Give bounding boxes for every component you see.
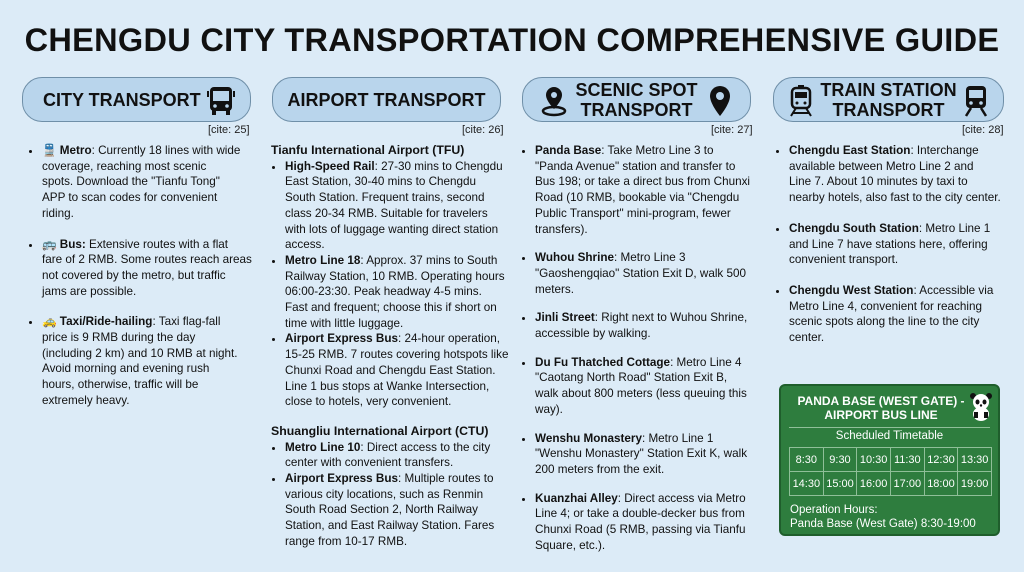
text: city transport: 🚕 Taxi/Ride-hailing: Taxi flag-fall	[42, 315, 220, 328]
text: airport transport: various city locations, such as Renmin	[285, 488, 483, 501]
operation hours: Operation Hours:	[790, 504, 878, 516]
text: scenic spots	[522, 144, 750, 552]
panel header: city transport: CITY TRANSPORT	[43, 90, 201, 110]
text: scenic spots: Panda Base: Take Metro Line 3 to	[535, 144, 713, 157]
text: airport transport: Metro Line 10: Direct access to the city	[285, 441, 490, 454]
timetable grid: 18:00	[927, 478, 955, 490]
text: airport transport: Shuangliu International Airport (CTU)	[271, 424, 488, 438]
icon: train right	[965, 86, 987, 117]
text: scenic spots: "Wenshu Monastery" Station Exit K, walk	[535, 447, 747, 460]
timetable grid: 15:00	[826, 478, 854, 490]
text: scenic spots: "Panda Avenue" station and transfer to	[535, 160, 735, 173]
text: airport transport: range from 10-17 RMB.	[285, 535, 407, 548]
icon: train left	[790, 85, 812, 116]
text: city transport: riding.	[42, 207, 74, 220]
text: city transport: jams are possible.	[42, 285, 136, 298]
text: airport transport: time with little luggage.	[285, 317, 403, 330]
text: scenic spots: transfers).	[535, 223, 588, 236]
timetable grid	[789, 447, 992, 496]
panel: panda base airport bus timetable	[779, 384, 1000, 536]
text: airport transport: Airport Express Bus: 24-hour operation,	[285, 332, 500, 345]
text: airport transport: Fast and frequent; choose this if short on	[285, 301, 497, 314]
text: airport transport: Metro Line 18: Approx. 37 mins to South	[285, 254, 497, 267]
text: city transport: spots. Download the "Tianfu Tong"	[42, 175, 220, 188]
text: city transport: hours, otherwise, traffic will be	[42, 378, 198, 391]
timetable grid: 10:30	[860, 454, 887, 466]
panel header: scenic spot transport	[522, 77, 751, 122]
text: city transport: APP to scan codes for convenient	[42, 191, 217, 204]
text: airport transport: South Road Section 2, North Railway	[285, 503, 478, 516]
icon: bus	[207, 87, 235, 115]
text: scenic spots: Wenshu Monastery: Metro Line 1	[535, 432, 713, 445]
text: airport transport: South Station. Frequent trains, second	[285, 191, 484, 204]
text: scenic spots: Public Transport" mini-program, fewer	[535, 207, 731, 220]
text: train stations	[776, 144, 1001, 344]
text: scenic spots: Line 4; or take a double-decker bus from	[535, 507, 745, 520]
text: airport transport: Line 1 bus stops at Wanke Intersection,	[285, 380, 489, 393]
cite 27: [cite: 27]	[711, 124, 753, 136]
text: scenic spots: Bus 198; or take a direct bus from Chunxi	[535, 175, 750, 188]
text: train stations: Chengdu East Station: Interchange	[789, 144, 979, 157]
text: airport transport: 06:00-23:30. Peak headway 4-5 mins.	[285, 285, 482, 298]
text: city transport: 🚌 Bus: Extensive routes with a flat	[42, 238, 228, 251]
text: airport transport: class 20-34 RMB. Suitable for travelers	[285, 207, 488, 220]
text: city transport	[29, 144, 252, 407]
timetable title: PANDA BASE (WEST GATE) -	[797, 394, 965, 408]
text: train stations: Chengdu South Station: Metro Line 1	[789, 222, 990, 235]
text: airport transport: Chunxi Road and Chengdu East Station.	[285, 364, 496, 377]
text: scenic spots: Road (10 RMB, bookable via "Chengdu	[535, 191, 739, 204]
text: scenic spots: 200 meters from the exit.	[535, 463, 664, 476]
timetable title: AIRPORT BUS LINE	[824, 408, 938, 422]
text: airport transport: with lots of luggage wanting direct station	[285, 223, 498, 236]
text: scenic spots: accessible by walking.	[535, 327, 651, 340]
timetable grid: 11:30	[894, 454, 921, 466]
text: airport transport: 15-25 RMB. 7 routes covering hotspots like	[285, 348, 508, 361]
panel header: train station transport	[773, 77, 1004, 122]
text: airport transport: East Station, 30-40 mins to Chengdu	[285, 175, 476, 188]
text: scenic spots: "Caotang North Road" Station Exit B,	[535, 371, 727, 384]
operation hours: Panda Base (West Gate) 8:30-19:00	[790, 518, 976, 530]
text: scenic spots: way).	[535, 403, 563, 416]
text: scenic spots: "Gaoshengqiao" Station Exit D, walk 500	[535, 267, 746, 280]
text: airport transport	[271, 143, 508, 548]
text: city transport: fare of 2 RMB. Some routes reach areas	[42, 253, 252, 266]
text: airport transport: access.	[285, 238, 325, 251]
text: city transport: not covered by the metro, but traffic	[42, 269, 226, 282]
text: train stations: center.	[789, 331, 824, 344]
text: train stations: Metro Line 4, convenient for reaching	[789, 300, 982, 313]
text: train stations: and Line 7 have stations here, offering	[789, 238, 988, 251]
text: train stations: Line 7. About 10 minutes by taxi to	[789, 175, 968, 188]
panel header: train station transport: TRANSPORT	[832, 100, 944, 120]
timetable grid: 9:30	[829, 454, 851, 466]
text: airport transport: Railway Station, 10 RMB. Operating hours	[285, 270, 505, 283]
text: train stations: nearby hotels, also fast to the city center.	[789, 191, 1001, 204]
timetable title	[797, 394, 965, 422]
cite 28: [cite: 28]	[962, 124, 1004, 136]
panel header: city transport	[22, 77, 251, 122]
text: scenic spots: Chunxi Road (5 RMB, passing via Tianfu	[535, 523, 745, 536]
text: scenic spots: Jinli Street: Right next to Wuhou Shrine,	[535, 311, 747, 324]
timetable grid: 12:30	[927, 454, 955, 466]
text: city transport: price is 9 RMB during the day	[42, 331, 195, 344]
text: scenic spots: Wuhou Shrine: Metro Line 3	[535, 251, 685, 264]
text: city transport: 🚆 Metro: Currently 18 lines with wide	[42, 144, 240, 157]
subtitle: Scheduled Timetable	[836, 430, 943, 442]
icon: location pin with ring	[542, 87, 566, 116]
text: city transport: coverage, reaching most scenic	[42, 160, 206, 173]
panel header: scenic spot transport: SCENIC SPOT	[575, 80, 698, 100]
text: scenic spots: meters.	[535, 283, 574, 296]
text: scenic spots: walk about 800 meters (less queuing this	[535, 387, 747, 400]
timetable grid: 13:30	[961, 454, 988, 466]
text: train stations: convenient transport.	[789, 253, 898, 266]
text: airport transport: Tianfu International Airport (TFU)	[271, 143, 464, 157]
text: city transport: (including 2 km) and 10 RMB at night.	[42, 347, 238, 360]
cite 26: [cite: 26]	[462, 124, 504, 136]
text: city transport: Avoid morning and evening rush	[42, 362, 209, 375]
timetable grid: 19:00	[961, 478, 988, 490]
icon: panda	[970, 393, 992, 421]
text: city transport: extremely heavy.	[42, 394, 129, 407]
panel header: scenic spot transport: TRANSPORT	[580, 100, 692, 120]
timetable grid: 8:30	[796, 454, 817, 466]
text: scenic spots: Square, etc.).	[535, 539, 605, 552]
timetable grid: 17:00	[894, 478, 921, 490]
text: airport transport: Airport Express Bus: Multiple routes to	[285, 472, 494, 485]
text: train stations: available between Metro Line 2 and	[789, 160, 974, 173]
timetable grid: 16:00	[860, 478, 887, 490]
text: airport transport: center with convenient transfers.	[285, 456, 453, 469]
cite 25: [cite: 25]	[208, 124, 250, 136]
panel header: airport transport: AIRPORT TRANSPORT	[288, 90, 486, 110]
text: airport transport: Station, and East Railway Station. Fares	[285, 519, 494, 532]
text: airport transport: High-Speed Rail: 27-30 mins to Chengdu	[285, 160, 503, 173]
panel header: train station transport: TRAIN STATION	[820, 80, 957, 100]
text: train stations: Chengdu West Station: Accessible via	[789, 284, 993, 297]
text: train stations: scenic spots along the line to the city	[789, 315, 979, 328]
text: scenic spots: Du Fu Thatched Cottage: Metro Line 4	[535, 356, 742, 369]
icon: location pin	[710, 86, 730, 116]
title: CHENGDU CITY TRANSPORTATION COMPREHENSIVE GUIDE	[25, 22, 999, 58]
text: airport transport: close to hotels, very convenient.	[285, 395, 451, 408]
timetable grid: 14:30	[793, 478, 820, 490]
panel header: airport transport	[272, 77, 501, 122]
text: scenic spots: Kuanzhai Alley: Direct access via Metro	[535, 492, 746, 505]
operation hours	[790, 504, 976, 530]
